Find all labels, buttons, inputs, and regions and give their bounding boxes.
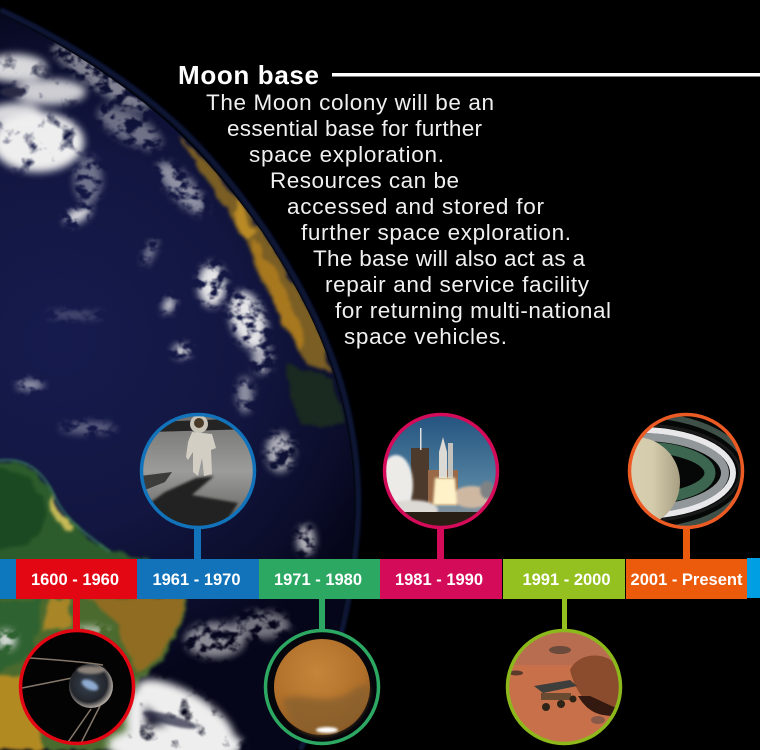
body text block [206,90,611,349]
rings [642,416,741,526]
astronaut shadow [147,476,238,529]
segment 1981-1990 [380,559,502,599]
right end segment [747,558,760,598]
south america land, north [0,461,150,600]
exhaust flame [433,478,457,505]
connector [319,599,325,631]
dense clouds [0,54,243,750]
segment 1600-1960 [16,559,137,599]
body text block: further space exploration. [301,220,571,245]
segment 1961-1970 [137,559,259,599]
segment 2001-Present [626,559,747,599]
limb land [178,135,345,425]
segment 1991-2000 [503,559,625,599]
segment 1971-1980 [259,559,380,599]
shuttle circle [386,416,496,526]
planet mars [274,639,370,735]
atmosphere limb [0,10,358,750]
wispy clouds [0,36,315,658]
connector [437,527,444,559]
sputnik circle [22,632,132,742]
moon walk photo node [140,413,256,559]
bottom cloud gaps [142,710,198,730]
saturn circle [631,416,741,526]
segment 1981-1990: 1981 - 1990 [395,571,483,589]
body text block: repair and service facility [325,272,590,297]
sputnik sphere [69,664,113,708]
mars rover photo node [506,599,622,745]
connector [73,599,80,631]
mars circle [268,632,376,742]
body text block: The base will also act as a [313,246,585,271]
sputnik photo node [19,599,135,745]
shuttle stack [439,437,447,478]
cyclone eye shading [0,87,24,97]
astronaut [186,415,216,476]
body text block: Resources can be [270,168,459,193]
connector [683,527,690,561]
body text block: accessed and stored for [287,194,544,219]
timeline bar [0,558,760,599]
body text block: space exploration. [249,142,444,167]
segment 1971-1980: 1971 - 1980 [274,571,362,589]
segment 2001-Present: 2001 - Present [631,571,743,589]
boulder [570,656,619,708]
ocean [0,14,354,750]
heading rule [332,73,760,76]
heading: Moon base [178,60,319,90]
smoke clouds [386,453,494,512]
rover circle [509,632,619,742]
connector [562,599,567,631]
surface details [0,36,345,750]
coast glow [0,460,110,552]
body text block: The Moon colony will be an [206,90,494,115]
body text block: essential base for further [227,116,482,141]
saturn photo node [628,412,744,559]
earth [0,10,358,750]
segment 1961-1970: 1961 - 1970 [152,571,241,589]
launch tower [411,448,429,503]
left end segment [0,559,16,599]
shuttle launch photo node [379,413,499,559]
south america land, south [0,596,188,750]
planet saturn [631,438,680,520]
moon walk circle [143,416,253,526]
connector [194,527,201,559]
segment 1991-2000: 1991 - 2000 [522,571,611,589]
antennas [22,658,103,745]
mars photo node [264,599,380,745]
segment 1600-1960: 1600 - 1960 [31,571,119,589]
body text block: for returning multi-national [335,298,611,323]
title [178,60,760,90]
rover [534,680,577,711]
body text block: space vehicles. [344,324,507,349]
